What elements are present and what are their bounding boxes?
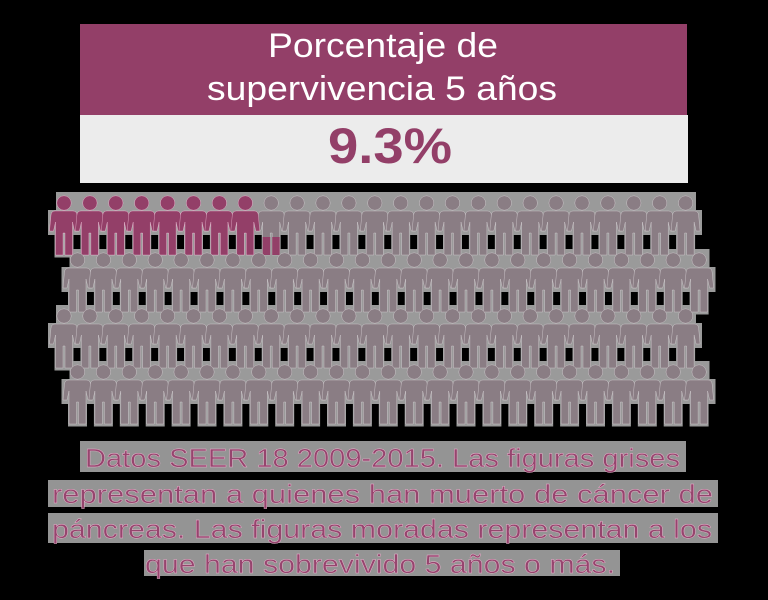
title: supervivencia 5 años [207, 70, 557, 108]
caption text: que han sobrevivido 5 años o más. [145, 549, 615, 579]
survival percentage: 9.3% [328, 118, 452, 174]
row 1 gray figures [50, 196, 700, 255]
stat background [80, 115, 688, 183]
row 1 purple survivor figures [50, 196, 260, 255]
caption text: páncreas. Las figuras moradas representan a los [52, 514, 712, 544]
title: Porcentaje de [268, 27, 498, 65]
title [207, 27, 557, 108]
pictogram: 100 figures [48, 192, 716, 426]
title bar [80, 24, 687, 115]
caption [48, 441, 718, 579]
partial purple figure 0.3 [262, 237, 280, 255]
caption text: Datos SEER 18 2009-2015. Las figuras grises [85, 443, 680, 473]
caption halo bands [48, 441, 718, 576]
header panel [80, 24, 688, 183]
row 3 gray figures [50, 309, 700, 368]
row 4 gray figures [63, 365, 714, 424]
caption text: representan a quienes han muerto de cáncer de [52, 479, 713, 509]
caption text [52, 443, 713, 579]
row 2 gray figures [63, 253, 714, 312]
figure halos [48, 192, 716, 426]
